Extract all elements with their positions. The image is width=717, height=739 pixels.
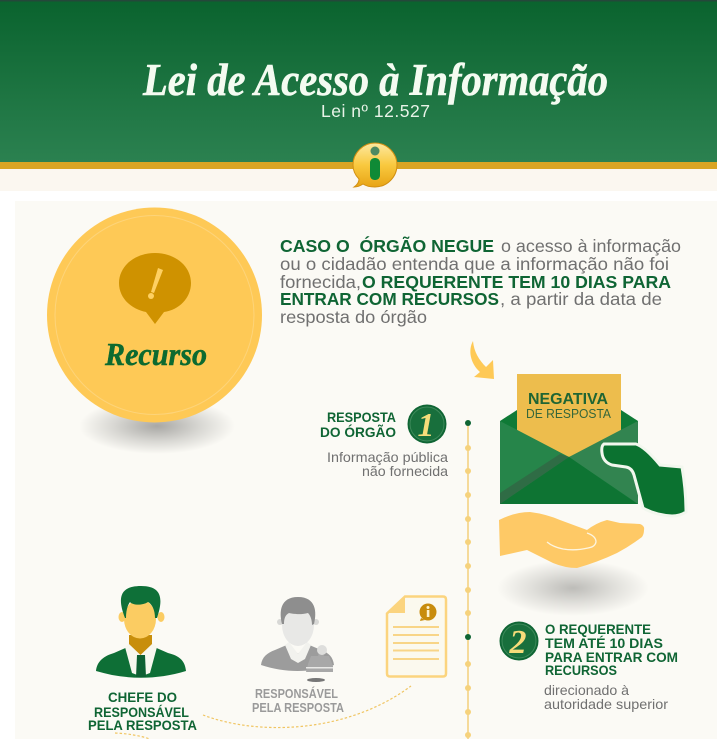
- hand shadow: [497, 560, 649, 616]
- step 2 number: 2: [508, 624, 526, 661]
- step 1 description: [327, 449, 448, 479]
- icon: green person: [96, 586, 186, 678]
- icon: grey person with stamp: [261, 597, 334, 682]
- step 2 heading: O REQUERENTE: [545, 621, 651, 637]
- step 2 number: [500, 622, 538, 661]
- intro text block: , a partir da data de: [500, 289, 662, 309]
- person label: responsável: [252, 686, 344, 715]
- icon: information speech bubble: [353, 143, 397, 187]
- step 2 heading: RECURSOS: [545, 662, 617, 678]
- intro text block: ENTRAR COM RECURSOS: [280, 289, 499, 309]
- step 1 number: 1: [418, 407, 434, 444]
- panel: recurso: [15, 201, 717, 739]
- step 1: [320, 404, 448, 479]
- person label: chefe: PELA RESPOSTA: [88, 717, 197, 733]
- step 1 heading: RESPOSTA: [327, 409, 396, 425]
- envelope front: [500, 421, 569, 504]
- person label: responsável: RESPONSÁVEL: [255, 686, 338, 701]
- step 1 description: Informação pública: [327, 449, 448, 465]
- title: Lei de Acesso à Informação: [142, 55, 608, 105]
- letter: [517, 374, 621, 457]
- badge label: Recurso: [104, 336, 207, 372]
- subtitle: Lei nº 12.527: [321, 101, 430, 121]
- step 2 heading: [545, 621, 678, 678]
- step 1 description: não fornecida: [362, 463, 448, 479]
- dashed connector: document to person: [203, 686, 411, 728]
- person label: chefe: RESPONSÁVEL: [94, 704, 189, 720]
- person label: responsável: PELA RESPOSTA: [252, 701, 344, 715]
- icon: open yellow hand: [499, 512, 644, 568]
- envelope back: [500, 410, 638, 504]
- icon: document: [387, 596, 446, 676]
- step 2 description: [544, 682, 668, 712]
- step 2 description: autoridade superior: [544, 696, 668, 712]
- intro text block: CASO O ÓRGÃO NEGUE: [280, 235, 494, 256]
- step 2 description: direcionado à: [544, 682, 629, 698]
- person label: chefe: [88, 689, 197, 733]
- intro text block: ou o cidadão entenda que a informação não foi: [280, 254, 669, 274]
- step 2 heading: TEM ATÉ 10 DIAS: [545, 635, 663, 651]
- intro text block: resposta do órgão: [280, 307, 427, 327]
- icon: exclamation bubble: [119, 253, 191, 324]
- recurso badge: [47, 208, 262, 422]
- step 1 heading: [320, 409, 396, 440]
- letter: NEGATIVA: [528, 391, 608, 408]
- step 1 heading: DO ÓRGÃO: [320, 423, 396, 440]
- intro text block: [280, 235, 681, 327]
- intro text block: o acesso à informação: [501, 236, 681, 256]
- intro text block: O REQUERENTE TEM 10 DIAS PARA: [362, 272, 671, 292]
- step 2: [500, 621, 678, 712]
- step 2 heading: PARA ENTRAR COM: [545, 649, 678, 665]
- envelope with denial letter: [500, 374, 638, 504]
- circle shadow: [79, 398, 235, 454]
- person label: chefe: CHEFE DO: [108, 689, 177, 705]
- letter: DE RESPOSTA: [526, 406, 611, 421]
- icon: green hand holding envelope: [602, 444, 686, 516]
- timeline: [465, 420, 471, 739]
- arrow: [470, 341, 494, 379]
- header band: [0, 0, 717, 191]
- intro text block: fornecida,: [280, 272, 361, 292]
- dashed connector: lower: [115, 733, 150, 739]
